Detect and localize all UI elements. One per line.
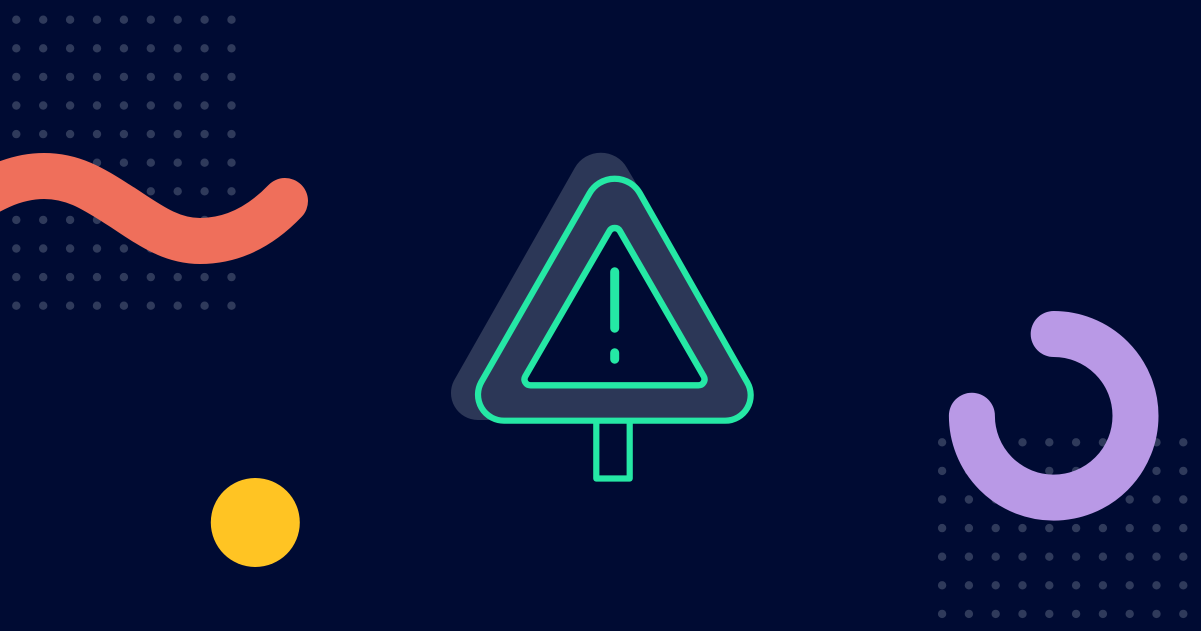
yellow circle: [211, 478, 300, 567]
dot grid: bottom right: [942, 442, 1183, 614]
exclamation mark: [610, 272, 619, 359]
sign shadow: [451, 153, 640, 420]
purple ring arc: [972, 334, 1136, 498]
inner triangle: [524, 228, 705, 385]
outer triangle: [478, 179, 751, 421]
warning sign icon: [451, 153, 751, 478]
dot grid: top left: [16, 20, 231, 306]
sign post: [596, 421, 630, 478]
coral wave: [0, 176, 285, 241]
